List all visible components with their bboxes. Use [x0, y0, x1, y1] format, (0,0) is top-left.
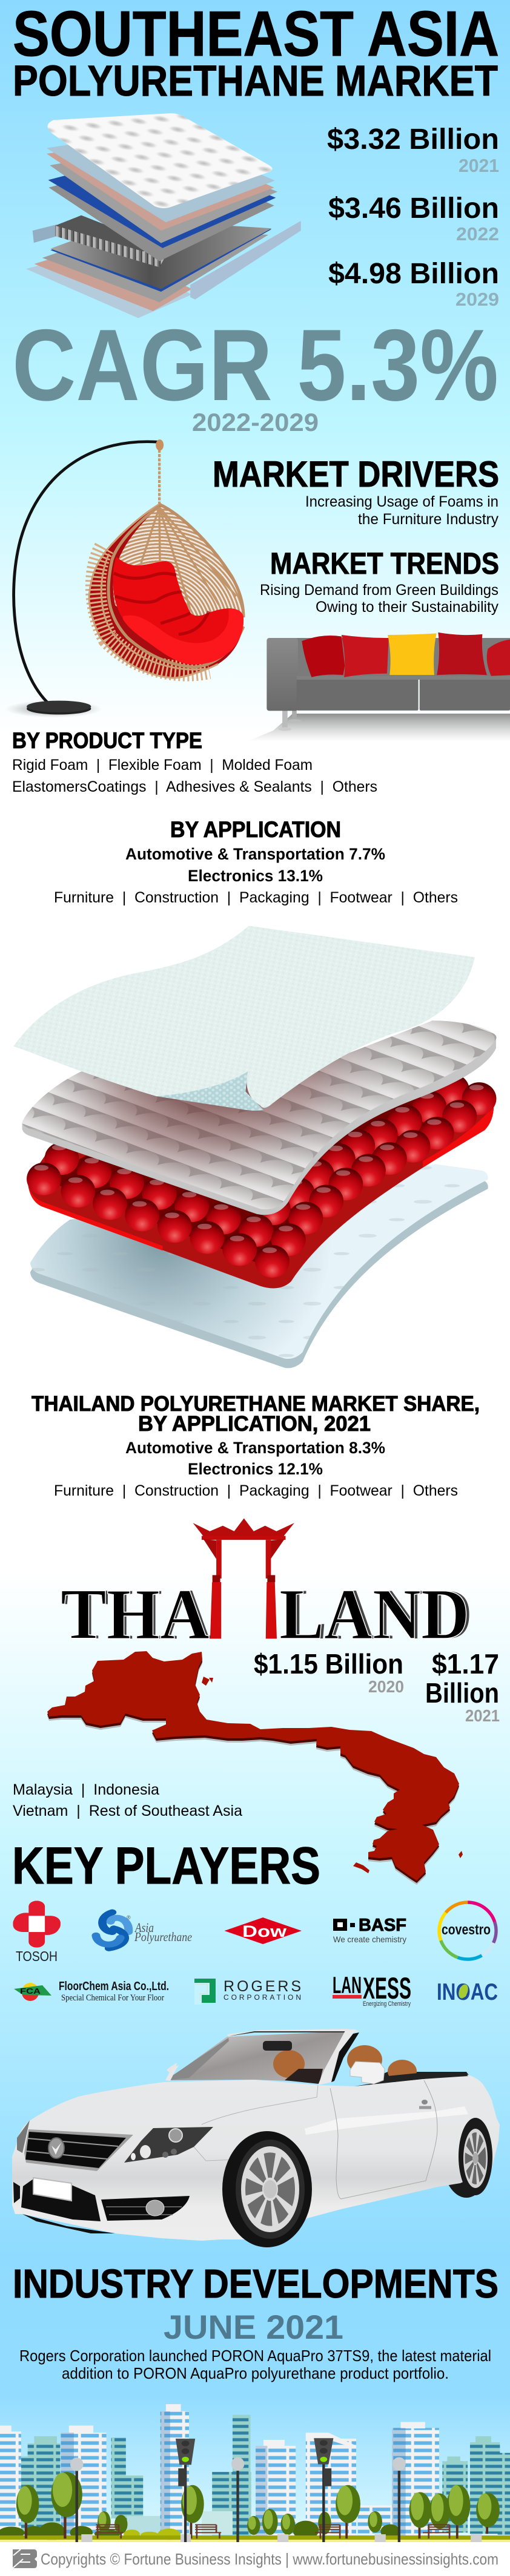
by product type: ElastomersCoatings | Adhesives & Sealants | Others: [12, 778, 377, 795]
Thailand wordmark with gate: [61, 1518, 472, 1654]
windscreen and seats: [165, 2029, 469, 2085]
top film sheet: [14, 926, 475, 1111]
wordmark: [61, 1574, 469, 1654]
logo: Dow: Dow: [242, 1922, 287, 1940]
by product type: Rigid Foam | Flexible Foam | Molded Foam: [12, 757, 313, 774]
benches: [96, 2525, 449, 2538]
wordmark: LAND: [279, 1574, 469, 1654]
logo: Rogers Corporation: ROGERS: [224, 1978, 301, 1995]
logo: BASF: We create chemistry: [333, 1934, 406, 1944]
illustration: exploded mattress: [26, 113, 301, 318]
rest of region list: Vietnam | Rest of Southeast Asia: [13, 1802, 242, 1819]
by product type: BY PRODUCT TYPE: [12, 728, 202, 753]
market trends: [260, 547, 499, 616]
logo: Lanxess: [333, 1971, 411, 2008]
icon: giant swing gate: [193, 1518, 294, 1638]
stat: 2021 value: 2021: [459, 155, 499, 176]
logo: FloorChem Asia: [14, 1980, 169, 2003]
trees: [16, 2472, 500, 2538]
market trends: Owing to their Sustainability: [316, 599, 498, 616]
logo: FloorChem Asia: FloorChem Asia Co.,Ltd.: [59, 1980, 169, 1993]
red cushion: [113, 557, 243, 665]
logo: Asia Polyurethane: ®: [127, 1914, 131, 1920]
wordmark shadow: [63, 1574, 472, 1654]
front fascia: [13, 2120, 213, 2233]
market drivers: the Furniture Industry: [358, 511, 498, 528]
stat: 2022 value: [328, 192, 499, 245]
stat: 2021 value: [327, 123, 499, 176]
rear wheel: [459, 2118, 492, 2195]
front wheel: [222, 2131, 312, 2247]
logo: Rogers Corporation: [194, 1978, 301, 2005]
by product type: [12, 728, 377, 795]
logo: Asia Polyurethane: Asia: [134, 1920, 154, 1935]
date: JUNE 2021: [164, 2308, 343, 2346]
stat: 2029 value: 2029: [455, 289, 499, 310]
development description: [19, 2347, 491, 2382]
stat: 2022 value: 2022: [456, 223, 499, 245]
CAGR headline: 2022-2029: [192, 408, 319, 436]
quilted white layer: [22, 1020, 497, 1215]
logo: Dow: [224, 1917, 302, 1944]
market drivers: [213, 454, 499, 528]
logo: Rogers Corporation: CORPORATION: [224, 1993, 301, 2002]
illustration: white convertible car: [12, 2029, 500, 2247]
Thailand 2020 value: [254, 1648, 404, 1696]
rest of region list: Malaysia | Indonesia: [13, 1781, 159, 1798]
stat: 2029 value: [328, 258, 499, 310]
Thailand 2021 value: Billion: [425, 1677, 499, 1709]
wordmark: THA: [61, 1574, 210, 1654]
logo: Asia Polyurethane: Polyurethane: [134, 1930, 192, 1944]
footer logo: [13, 2549, 37, 2568]
logo: Covestro: [428, 1891, 508, 1971]
logo: Tosoh: [13, 1901, 61, 1964]
market drivers: Increasing Usage of Foams in: [305, 493, 498, 510]
by application: Electronics 13.1%: [188, 867, 323, 885]
Thailand 2021 value: $1.17: [432, 1648, 499, 1680]
Thailand market share heading: Furniture | Construction | Packaging | Footwear | Others: [54, 1482, 458, 1499]
Thailand market share heading: THAILAND POLYURETHANE MARKET SHARE,: [31, 1392, 480, 1416]
footer band: [0, 2542, 510, 2576]
key players heading: KEY PLAYERS: [12, 1837, 320, 1895]
bushes and ground: [0, 2521, 510, 2542]
logo: Asia Polyurethane: [96, 1913, 192, 1948]
wordmark shadow: LAND: [282, 1574, 472, 1654]
Thailand 2020 value: $1.15 Billion: [254, 1648, 403, 1680]
buildings: [0, 2404, 510, 2537]
car body: [12, 2075, 500, 2241]
market trends: Rising Demand from Green Buildings: [260, 582, 498, 599]
logo: Lanxess: XESS: [363, 1971, 411, 2005]
logo: Tosoh: TOSOH: [16, 1948, 58, 1964]
logo: Covestro: covestro: [442, 1922, 491, 1938]
map of Thailand: [47, 1651, 463, 1885]
planters: [81, 2534, 482, 2542]
traffic lights: [176, 2438, 333, 2542]
stat: 2022 value: $3.46 Billion: [328, 192, 499, 225]
street lamps: [70, 2457, 406, 2542]
bottom foam layer: [30, 1164, 488, 1368]
illustration: sofa with pillows: [247, 632, 510, 741]
Thailand market share heading: BY APPLICATION, 2021: [138, 1412, 371, 1436]
title: [13, 0, 499, 105]
wicker pod: [89, 504, 243, 678]
red beads layer: [27, 1074, 496, 1288]
logo: FloorChem Asia: Special Chemical For Your Floor: [61, 1993, 164, 2003]
stat: 2021 value: $3.32 Billion: [327, 123, 499, 156]
illustration: foam layers: [14, 926, 497, 1368]
Thailand market share heading: Automotive & Transportation 8.3%: [125, 1439, 385, 1457]
illustration: hanging egg chair: [5, 439, 243, 718]
logo: Lanxess: LAN: [333, 1973, 362, 1999]
wordmark shadow: THA: [63, 1574, 212, 1654]
by application: BY APPLICATION: [170, 817, 341, 842]
Thailand market share heading: [31, 1392, 480, 1499]
Thailand market share heading: Electronics 12.1%: [188, 1460, 323, 1478]
Thailand 2020 value: 2020: [368, 1677, 404, 1696]
logo: FloorChem Asia: FCA: [20, 1986, 41, 1996]
illustration: city skyline: [0, 2404, 510, 2542]
development description: addition to PORON AquaPro polyurethane product portfolio.: [62, 2364, 449, 2382]
by application: Furniture | Construction | Packaging | Footwear | Others: [54, 889, 458, 906]
Thailand 2021 value: 2021: [465, 1706, 500, 1725]
rest of region list: [13, 1781, 242, 1819]
stat: 2029 value: $4.98 Billion: [328, 258, 499, 290]
logo: Lanxess: Energizing Chemistry: [363, 2000, 411, 2008]
Thailand 2021 value: [425, 1648, 500, 1725]
logo: BASF: BASF: [359, 1916, 406, 1935]
logo: BASF: [333, 1916, 406, 1944]
by application: Automotive & Transportation 7.7%: [125, 845, 385, 863]
floor lamp stand: [5, 439, 164, 718]
rear tyre: [442, 2118, 491, 2198]
body panels: [165, 2062, 468, 2199]
by application: [54, 817, 458, 906]
